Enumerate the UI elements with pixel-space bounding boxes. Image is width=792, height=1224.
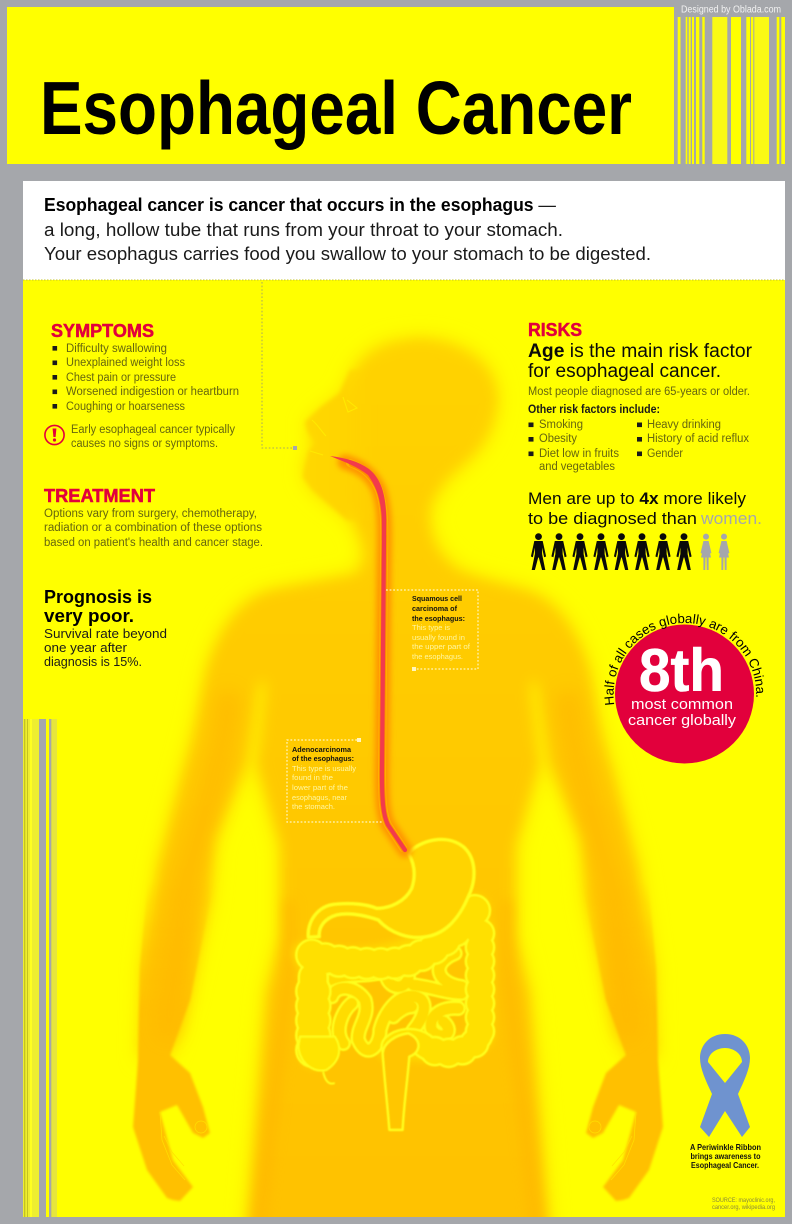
gender statistic: women. <box>700 509 762 528</box>
risk factor list: History of acid reflux <box>647 433 749 445</box>
gender statistic: to be diagnosed than <box>528 509 697 528</box>
symptoms list: Worsened indigestion or heartburn <box>66 386 239 398</box>
treatment text <box>44 508 263 549</box>
title banner <box>7 7 674 164</box>
symptoms note <box>71 424 235 450</box>
callout: squamous cell carcinoma: the esophagus. <box>412 652 463 661</box>
prognosis text: one year after <box>44 640 128 655</box>
risks heading: RISKS <box>528 320 582 340</box>
risk factor list: and vegetables <box>539 461 615 473</box>
arm shading <box>168 700 628 1030</box>
badge: 8th most common cancer: cancer globally <box>628 712 737 729</box>
risk factor list: Smoking <box>539 419 583 431</box>
risks section <box>528 320 762 570</box>
curved caption <box>614 623 756 705</box>
treatment text: radiation or a combination of these options <box>44 522 262 534</box>
esophagus throat taper <box>330 456 386 540</box>
symptoms list: Difficulty swallowing <box>66 343 167 355</box>
ribbon caption <box>690 1143 761 1170</box>
barcode stripes: top right <box>678 17 785 164</box>
intro text: a long, hollow tube that runs from your throat to your stomach. <box>44 220 563 240</box>
ribbon caption: brings awareness to <box>690 1152 760 1161</box>
risk factor list: Diet low in fruits <box>539 448 619 460</box>
source note: SOURCE: mayoclinic.org, <box>712 1198 775 1204</box>
barcode stripes: left <box>23 719 58 1217</box>
main yellow panel <box>23 280 785 1217</box>
treatment text: Options vary from surgery, chemotherapy, <box>44 508 257 520</box>
callout: adenocarcinoma: esophagus, near <box>292 793 347 802</box>
cecum <box>298 1037 339 1071</box>
callout: adenocarcinoma: the stomach. <box>292 802 335 811</box>
callout: adenocarcinoma: of the esophagus: <box>292 754 354 763</box>
intro panel <box>23 181 785 280</box>
face profile <box>303 370 354 520</box>
title: Esophageal Cancer <box>40 66 632 150</box>
prognosis heading: very poor. <box>44 606 134 626</box>
gender statistic <box>528 489 762 528</box>
organ glow <box>303 907 482 1057</box>
esophagus tube <box>382 535 405 850</box>
designer credit: Designed by Oblada.com <box>681 4 781 16</box>
callout: squamous cell carcinoma: Squamous cell <box>412 594 462 603</box>
icon: periwinkle ribbon <box>700 1034 750 1137</box>
callout: adenocarcinoma: lower part of the <box>292 783 348 792</box>
callout: squamous cell carcinoma: This type is <box>412 623 450 632</box>
main risk statement: for esophageal cancer. <box>528 361 721 382</box>
ribbon caption: Esophageal Cancer. <box>691 1161 759 1170</box>
badge: 8th most common cancer: Half of all cases globally are from China. <box>604 614 764 705</box>
risk factor list: Heavy drinking <box>647 419 721 431</box>
callout: squamous cell carcinoma: usually found in <box>412 633 465 642</box>
callout: squamous cell carcinoma: carcinoma of <box>412 604 457 613</box>
callout: adenocarcinoma: found in the <box>292 773 333 782</box>
face details <box>310 397 357 455</box>
callout: adenocarcinoma <box>287 738 382 822</box>
source note <box>712 1198 775 1211</box>
treatment section <box>44 486 263 549</box>
prognosis text <box>44 626 167 669</box>
badge text: most common <box>631 696 733 713</box>
esophagus <box>330 456 405 850</box>
age note: Most people diagnosed are 65-years or older. <box>528 386 750 398</box>
body silhouette <box>133 335 663 1224</box>
intro text: Esophageal cancer is cancer that occurs in the esophagus — <box>44 195 556 215</box>
body halo <box>138 335 658 1224</box>
symptoms heading: SYMPTOMS <box>51 321 154 341</box>
source note: cancer.org, wikipedia.org <box>712 1205 775 1211</box>
esophagus inner glow <box>352 464 404 849</box>
risk factor list: Obesity <box>539 433 577 445</box>
small intestine <box>330 953 462 1050</box>
digestive organs <box>298 839 482 1130</box>
prognosis text: Survival rate beyond <box>44 626 167 641</box>
badge number: 8th <box>639 637 724 704</box>
esophagus glow <box>345 462 405 850</box>
symptoms list: Coughing or hoarseness <box>66 401 185 413</box>
right forearm and hand <box>585 880 663 1201</box>
symptoms list: Unexplained weight loss <box>66 357 185 369</box>
gender statistic: Men are up to 4x more likely <box>528 489 747 508</box>
callout: squamous cell carcinoma <box>386 590 478 671</box>
prognosis text: diagnosis is 15%. <box>44 654 142 669</box>
icon: warning <box>45 425 64 445</box>
appendix <box>323 1073 334 1084</box>
symptoms section <box>45 321 239 450</box>
body core <box>138 335 658 1224</box>
symptoms note: causes no signs or symptoms. <box>71 438 218 450</box>
main risk statement <box>528 341 753 382</box>
treatment heading: TREATMENT <box>44 486 155 506</box>
badge: 8th most common cancer <box>604 614 764 764</box>
risk factor list: Gender <box>647 448 683 460</box>
prognosis heading: Prognosis is <box>44 587 152 607</box>
risk factor list <box>539 419 749 473</box>
symptoms list: Chest pain or pressure <box>66 372 176 384</box>
prognosis heading <box>44 587 152 626</box>
ribbon caption: A Periwinkle Ribbon <box>690 1143 761 1152</box>
symptoms bullets <box>52 346 57 409</box>
callout: squamous cell carcinoma: the upper part of <box>412 642 471 651</box>
main risk statement: Age is the main risk factor <box>528 341 753 362</box>
icon: men pictogram <box>531 533 692 570</box>
callout: adenocarcinoma: Adenocarcinoma <box>292 745 352 754</box>
connector: head to intro <box>262 282 297 450</box>
intro text: Your esophagus carries food you swallow to your stomach to be digested. <box>44 244 651 264</box>
icon: women pictogram <box>701 534 729 570</box>
callout: squamous cell carcinoma: the esophagus: <box>412 614 465 623</box>
risk bullets <box>528 422 642 456</box>
colon <box>298 910 480 1130</box>
left forearm and hand <box>133 880 211 1201</box>
finger lines <box>160 1112 636 1180</box>
esophagus outer line <box>350 463 403 848</box>
symptoms list <box>66 343 239 413</box>
callout: adenocarcinoma: This type is usually <box>292 764 356 773</box>
symptoms note: Early esophageal cancer typically <box>71 424 235 436</box>
torso edge shading <box>281 906 515 948</box>
other factors heading: Other risk factors include: <box>528 404 660 416</box>
rectum <box>383 1033 418 1130</box>
treatment text: based on patient's health and cancer stage. <box>44 537 263 549</box>
intro text <box>44 195 651 264</box>
prognosis section <box>44 587 167 669</box>
stomach <box>308 839 474 938</box>
